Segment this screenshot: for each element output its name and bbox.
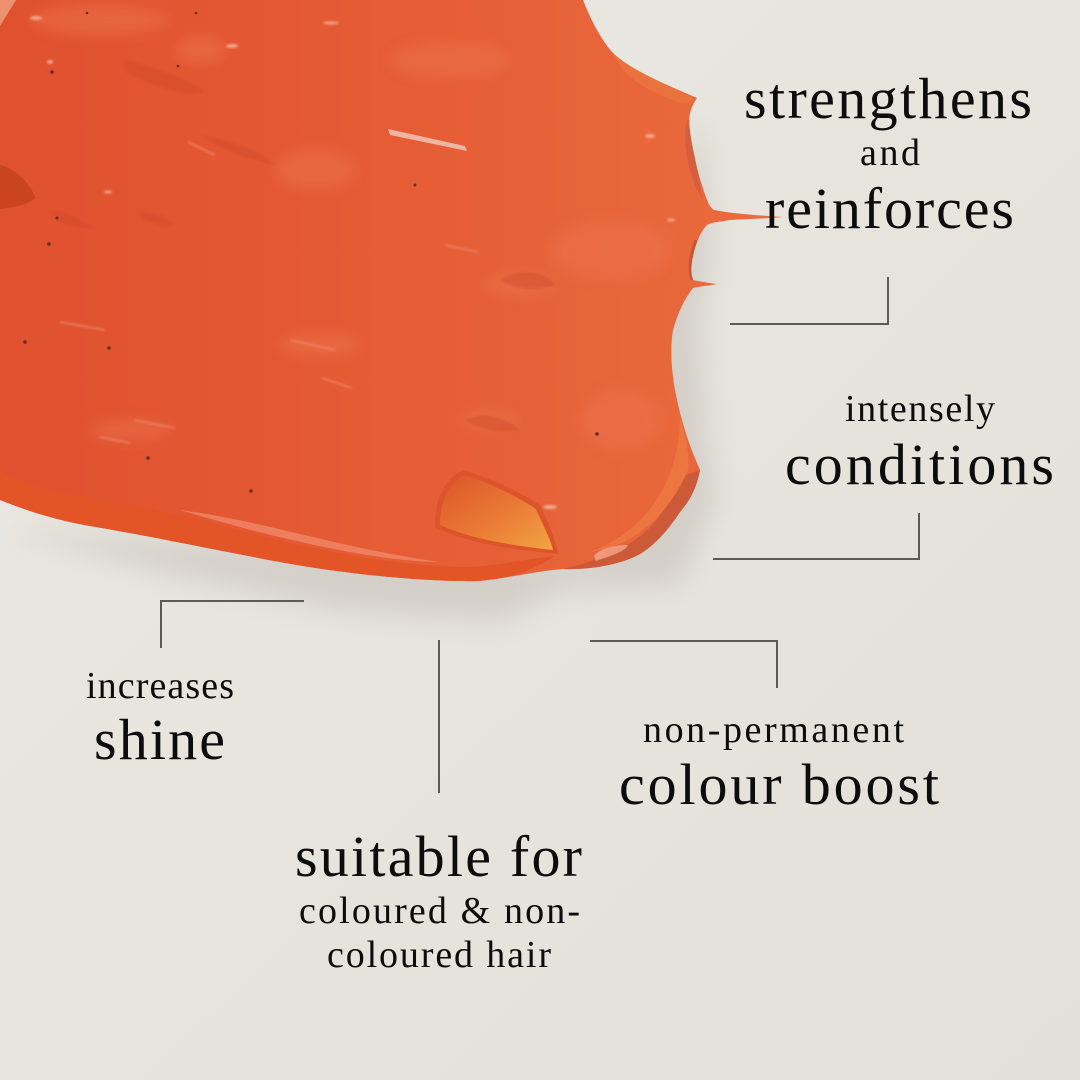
label: strengthens and reinforces xyxy=(744,66,1032,241)
label: suitable for coloured and non-coloured hair xyxy=(295,824,582,976)
label: suitable for coloured and non-coloured hair: coloured & non- xyxy=(299,890,580,932)
connector: shine xyxy=(161,601,304,648)
soft highlights xyxy=(30,5,670,450)
connector: conditions xyxy=(713,513,919,559)
right shaded edge xyxy=(685,118,702,198)
label: strengthens and reinforces: and xyxy=(860,132,920,174)
dents xyxy=(52,60,555,431)
label: strengthens and reinforces: strengthens xyxy=(744,66,1032,131)
connector: strengthens xyxy=(730,277,888,324)
label: non-permanent colour boost: colour boost xyxy=(619,752,939,817)
glossy streak xyxy=(388,129,467,151)
label: increases shine: shine xyxy=(94,707,225,772)
air pocket xyxy=(435,470,558,554)
label: intensely conditions: conditions xyxy=(785,432,1054,497)
label: strengthens and reinforces: reinforces xyxy=(765,176,1014,241)
label: non-permanent colour boost xyxy=(619,709,939,817)
connector: colour boost xyxy=(590,641,777,688)
specks xyxy=(23,12,599,493)
label: intensely conditions: intensely xyxy=(845,388,995,430)
connector: suitable xyxy=(438,640,440,793)
label: suitable for coloured and non-coloured hair: suitable for xyxy=(295,824,582,889)
label: intensely conditions xyxy=(785,388,1054,497)
label: non-permanent colour boost: non-permanent xyxy=(643,709,904,751)
streaks xyxy=(60,142,478,443)
label: increases shine xyxy=(86,665,234,772)
label: suitable for coloured and non-coloured hair: coloured hair xyxy=(327,934,551,976)
label: increases shine: increases xyxy=(86,665,234,707)
small gloss flecks xyxy=(30,16,675,509)
top-left corner highlight xyxy=(0,0,16,26)
cream swatch xyxy=(0,0,783,622)
left dent xyxy=(0,165,35,209)
outer rim xyxy=(563,470,700,569)
